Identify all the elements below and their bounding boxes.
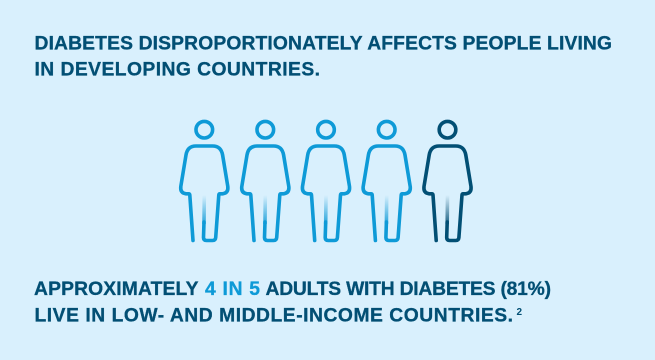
statistic text: 2: [516, 307, 522, 318]
heading: [34, 34, 612, 81]
icon: person 2: [242, 121, 289, 240]
icon: person 4: [363, 121, 410, 240]
icon: person 5 highlighted: [424, 121, 471, 240]
icon: person 3: [302, 121, 350, 240]
statistic text: LIVE IN LOW- AND MIDDLE-INCOME COUNTRIES.: [34, 306, 513, 327]
statistic text: ADULTS WITH DIABETES (81%): [266, 279, 551, 300]
statistic text: APPROXIMATELY: [34, 279, 199, 300]
heading: IN DEVELOPING COUNTRIES.: [34, 60, 320, 81]
statistic text: [34, 279, 551, 327]
statistic text: 4 IN 5: [205, 279, 260, 300]
heading: DIABETES DISPROPORTIONATELY AFFECTS PEOPLE LIVING: [34, 34, 612, 54]
pictogram: five people, one highlighted: [181, 121, 471, 240]
icon: person 1: [181, 121, 228, 240]
